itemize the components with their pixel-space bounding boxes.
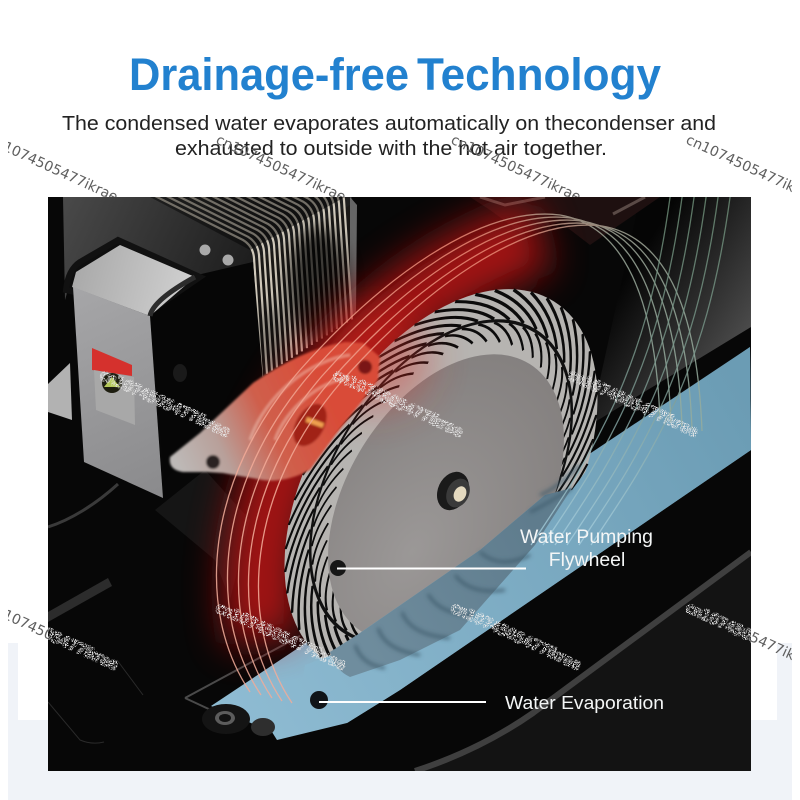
- watermarks on white: cn1074505477ikrae: [213, 132, 348, 206]
- callout line: flywheel: [337, 568, 526, 570]
- watermarks on white: [0, 132, 800, 674]
- airflow arcs: exhaust side: [531, 190, 731, 545]
- speckled watermarks on photo: [48, 371, 751, 670]
- callout label: Water Pumping Flywheel: [520, 526, 653, 571]
- description text: [62, 113, 716, 160]
- warning label: [92, 348, 135, 425]
- airflow arcs: hot side: [216, 214, 702, 703]
- callout line: evaporation: [319, 701, 486, 703]
- blue tray covering lower flywheel: [300, 347, 751, 723]
- speckled watermarks on photo: cn1074505477ikrae: [565, 367, 700, 441]
- lower left dark parts: [48, 470, 300, 743]
- speckled watermarks on photo: cn1074505477ikrae: [97, 367, 232, 441]
- flywheel blade shadow: [330, 465, 580, 677]
- background panel: faded lower frame: [8, 643, 792, 800]
- hot bracket with pink disc: [170, 342, 380, 481]
- upper right floor plane: [470, 197, 751, 425]
- gray control block: [66, 240, 200, 498]
- washer and blob: [202, 704, 275, 736]
- callout dot: flywheel hole: [330, 560, 346, 576]
- speckled watermarks on photo: cn1074505477ikrae: [448, 600, 583, 674]
- speckled watermarks on photo: cn1074505477ikrae: [330, 367, 465, 441]
- callout label: Water Evaporation: Water Evaporation: [505, 692, 664, 713]
- flywheel flat disc: [328, 354, 564, 632]
- dark housing panel with bolts: [173, 244, 263, 382]
- callout label: Water Pumping Flywheel: Flywheel: [549, 549, 625, 571]
- heat sink back plate: [63, 197, 352, 300]
- description text: The condensed water evaporates automatically on thecondenser and: [62, 113, 716, 135]
- callout dot: evaporation hole: [310, 691, 328, 709]
- heat sink fins: [150, 197, 357, 377]
- watermarks on white: cn1074505477ikrae: [448, 132, 583, 206]
- speckled watermarks on photo: cn1074505477ikrae: [213, 600, 348, 674]
- title: Technology: [417, 49, 661, 100]
- lower right floor: [415, 552, 751, 771]
- red heat glow: [261, 235, 540, 640]
- photo: condenser and flywheel diagram: [48, 197, 751, 771]
- red tint over flywheel rim: [320, 310, 430, 410]
- flywheel hub: [437, 472, 470, 510]
- title: Drainage-free: [129, 49, 409, 100]
- blue water tray: [211, 347, 751, 740]
- callout label: Water Pumping Flywheel: Water Pumping: [520, 526, 653, 548]
- side bracket: [48, 363, 72, 420]
- flywheel: [284, 288, 598, 658]
- description text: exhausted to outside with the hot air together.: [175, 138, 607, 160]
